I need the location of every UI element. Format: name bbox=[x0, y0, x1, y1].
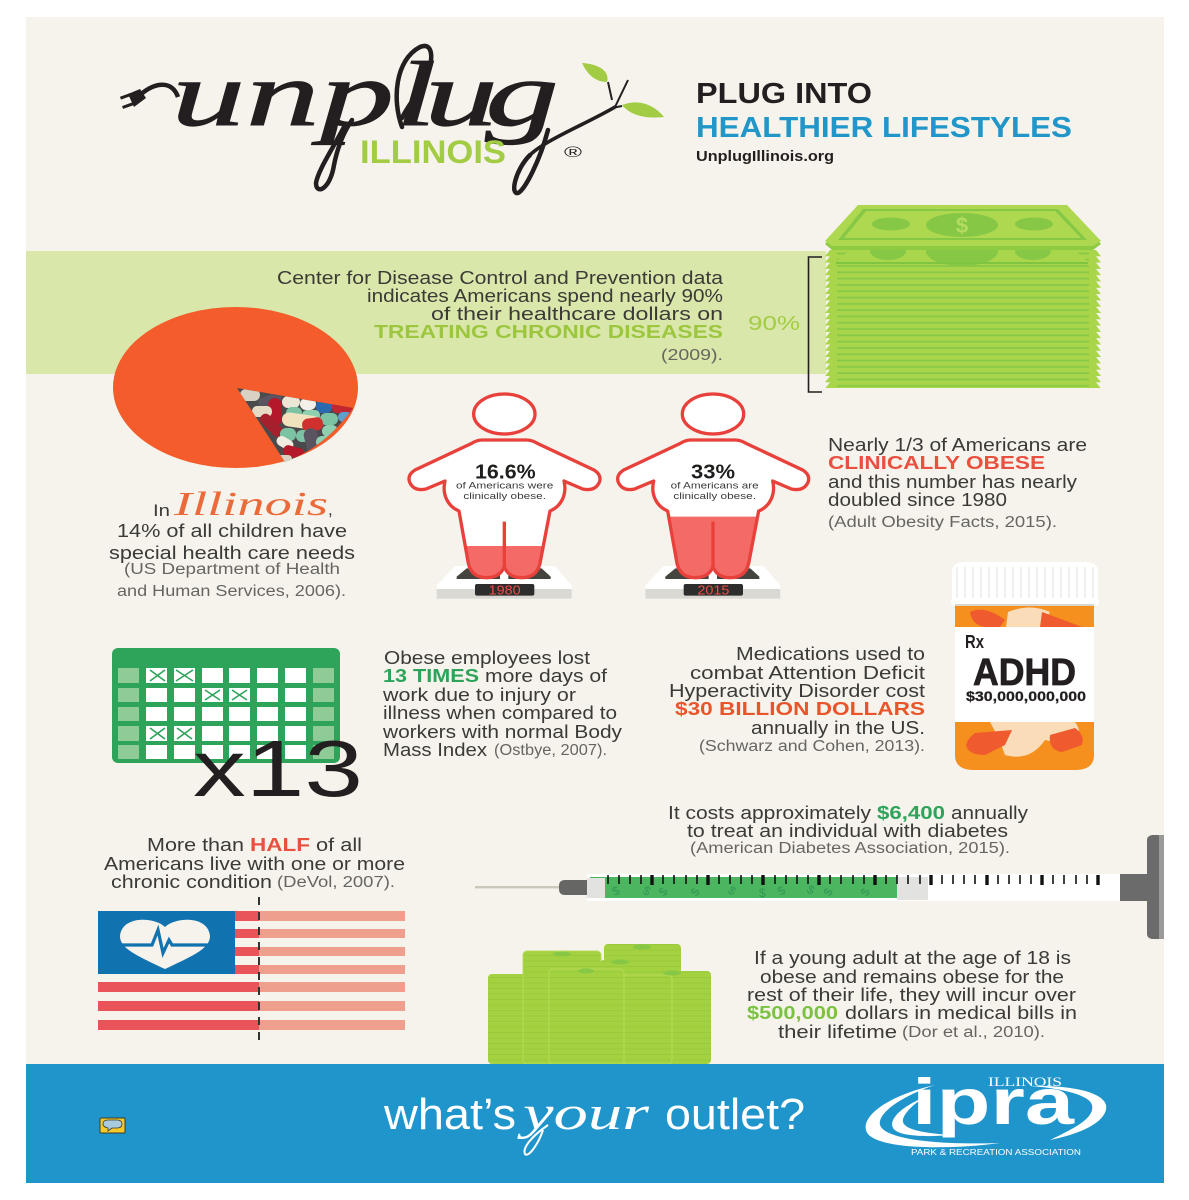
tagline: outlet? bbox=[665, 1090, 805, 1139]
text: diabetes cost: $6,400 bbox=[877, 803, 945, 823]
collar bbox=[587, 878, 605, 898]
icon: heart with pulse bbox=[120, 920, 210, 969]
calendar crosses bbox=[150, 670, 247, 739]
text: Illinois children: and Human Services, 2006). bbox=[117, 583, 346, 600]
icon: plug and cord bbox=[120, 85, 178, 109]
barrel bbox=[587, 874, 1122, 901]
icon: comment note bbox=[100, 1118, 125, 1133]
dollar signs: $ bbox=[687, 885, 703, 898]
text: clinically obese: (Adult Obesity Facts, 2015). bbox=[828, 514, 1057, 531]
pill wedge bbox=[237, 388, 353, 462]
text: ADHD medications: $30 BILLION DOLLARS bbox=[675, 699, 925, 719]
dollar signs: $ bbox=[759, 886, 766, 900]
body fill level bbox=[670, 516, 756, 576]
pill bottle bbox=[951, 562, 1099, 770]
text: diabetes cost: It costs approximately bbox=[668, 803, 871, 823]
text: more than half: More than bbox=[147, 835, 244, 855]
dollar signs: $ bbox=[820, 885, 836, 898]
cash piles bbox=[488, 944, 711, 1064]
text: diabetes cost: to treat an individual with diabetes bbox=[687, 821, 1008, 841]
tagline bbox=[383, 1087, 805, 1155]
text: Illinois children bbox=[109, 486, 355, 600]
top bill bbox=[825, 205, 1101, 250]
text: clinically obese: and this number has nearly bbox=[828, 472, 1077, 492]
text: Illinois children: special health care needs bbox=[109, 543, 355, 563]
text: chronic disease spending: indicates Americans spend nearly 90% bbox=[367, 286, 723, 306]
text: obese employees bbox=[382, 648, 622, 760]
plunger bbox=[1120, 874, 1147, 901]
money stack illustration bbox=[808, 205, 1101, 392]
pale stripes bbox=[259, 911, 405, 1030]
dollar signs: $ bbox=[610, 883, 623, 899]
calendar bbox=[112, 648, 363, 813]
text: obese employees: workers with normal Body bbox=[382, 722, 622, 742]
stack of bills bbox=[825, 250, 1101, 388]
dollar signs: $ bbox=[857, 885, 873, 898]
text: obese employees: Obese employees lost bbox=[384, 648, 590, 668]
heading block bbox=[696, 78, 1072, 165]
syringe bbox=[475, 835, 1164, 939]
text: chronic disease spending: Center for Disease Control and Prevention data bbox=[277, 268, 724, 288]
scale 2015 bbox=[645, 566, 780, 599]
figure: 1980 obesity bbox=[409, 394, 600, 599]
text: ADHD medications: Medications used to bbox=[736, 644, 925, 664]
head bbox=[682, 394, 744, 434]
text: lifetime medical bills bbox=[747, 948, 1077, 1042]
Rx: Rx bbox=[965, 632, 984, 652]
medicine bbox=[590, 877, 897, 898]
text: obese employees: more days of bbox=[485, 666, 608, 686]
text: chronic disease spending: of their healthcare dollars on bbox=[431, 304, 723, 324]
footer band bbox=[26, 1064, 1164, 1183]
plunger tip bbox=[897, 877, 928, 900]
website: UnplugIllinois.org bbox=[696, 148, 834, 165]
text: Illinois children: (US Department of Health bbox=[124, 561, 340, 578]
icon: twig and leaves bbox=[530, 63, 664, 155]
text: Illinois children: In bbox=[153, 501, 170, 520]
text: lifetime medical bills: (Dor et al., 2010). bbox=[902, 1024, 1045, 1041]
text: obese employees: work due to injury or bbox=[382, 685, 576, 705]
plunger handle bbox=[1147, 835, 1164, 939]
association name: PARK & RECREATION ASSOCIATION bbox=[911, 1147, 1081, 1157]
text: more than half: (DeVol, 2007). bbox=[277, 874, 395, 891]
text: ADHD medications bbox=[669, 644, 925, 755]
text: diabetes cost: (American Diabetes Association, 2015). bbox=[690, 840, 1010, 857]
text: more than half: of all bbox=[316, 835, 362, 855]
stat 33%: 33% bbox=[691, 461, 735, 483]
dollar signs: $ bbox=[775, 883, 788, 898]
x13: x13 bbox=[193, 724, 363, 813]
text: chronic disease spending: (2009). bbox=[661, 347, 723, 364]
minor ticks bbox=[608, 875, 1087, 884]
calendar weekend cells bbox=[118, 668, 334, 759]
logo wordmark: unplug bbox=[172, 43, 559, 145]
heading: healthier lifestyles: HEALTHIER LIFESTYLES bbox=[696, 112, 1072, 144]
text: obese employees: illness when compared to bbox=[383, 703, 617, 723]
green band bbox=[26, 251, 826, 374]
pie chart with pills bbox=[113, 307, 361, 468]
body bbox=[409, 440, 600, 578]
ipra wordmark: ipra bbox=[912, 1065, 1075, 1138]
dollar signs: $ bbox=[805, 882, 817, 898]
dollar signs: $ bbox=[641, 883, 653, 899]
hub bbox=[559, 880, 587, 895]
needle bbox=[475, 886, 559, 888]
caption: of Americans were bbox=[456, 481, 553, 491]
pills bbox=[966, 608, 1083, 757]
text: obese employees: (Ostbye, 2007). bbox=[494, 742, 607, 759]
dollar signs: $ bbox=[656, 885, 671, 899]
text: more than half bbox=[104, 835, 405, 892]
text: obese employees: 13 TIMES bbox=[383, 666, 479, 686]
logo: IPRA bbox=[866, 1065, 1106, 1157]
text: clinically obese: Nearly 1/3 of Americans are bbox=[828, 435, 1087, 455]
bracket bbox=[808, 257, 822, 392]
text: lifetime medical bills: obese and remains obese for the bbox=[760, 967, 1064, 987]
text: Illinois children: , bbox=[328, 500, 333, 519]
ILLINOIS: ILLINOIS bbox=[988, 1074, 1062, 1089]
stat 16.6%: 16.6% bbox=[475, 461, 536, 483]
text: ADHD medications: annually in the US. bbox=[751, 718, 925, 738]
logo: registered mark: ® bbox=[564, 144, 582, 161]
text: lifetime medical bills: their lifetime bbox=[778, 1022, 897, 1042]
tagline: your bbox=[516, 1087, 649, 1140]
head bbox=[474, 394, 535, 434]
handle highlight bbox=[1159, 835, 1164, 939]
body bbox=[618, 440, 809, 578]
caption: of Americans are bbox=[671, 481, 759, 491]
bottle body bbox=[955, 600, 1094, 770]
text: ADHD medications: Hyperactivity Disorder cost bbox=[669, 681, 925, 701]
tagline: what’s bbox=[383, 1090, 516, 1139]
scale 1980 bbox=[437, 566, 572, 599]
text: Illinois children: 14% of all children have bbox=[117, 521, 347, 541]
text: lifetime medical bills: rest of their life, they will incur over bbox=[747, 985, 1076, 1005]
flag with heart bbox=[98, 897, 405, 1047]
text: clinically obese bbox=[828, 435, 1087, 531]
dashed divider bbox=[258, 897, 260, 1047]
figure: 2015 obesity bbox=[618, 394, 809, 599]
logo: ILLINOIS: ILLINOIS bbox=[360, 134, 506, 170]
body outline bbox=[618, 440, 809, 578]
major ticks bbox=[652, 875, 1098, 885]
text: lifetime medical bills: dollars in medical bills in bbox=[845, 1003, 1077, 1023]
text: ADHD medications: (Schwarz and Cohen, 2013). bbox=[699, 738, 925, 755]
blue canton bbox=[98, 911, 235, 974]
amount: $30,000,000,000 bbox=[966, 688, 1086, 704]
text: diabetes cost bbox=[668, 803, 1028, 857]
caption line 2: clinically obese. bbox=[463, 491, 546, 501]
bottle label bbox=[955, 627, 1094, 722]
text: diabetes cost: annually bbox=[951, 803, 1028, 823]
text: clinically obese: doubled since 1980 bbox=[828, 490, 1007, 510]
scale 2015: 2015 bbox=[697, 583, 729, 597]
red stripes bbox=[98, 911, 259, 1030]
cap bbox=[951, 562, 1099, 606]
text: chronic disease spending: TREATING CHRONIC DISEASES bbox=[374, 322, 723, 342]
label: 90%: 90% bbox=[748, 313, 800, 335]
logo: Unplug Illinois bbox=[120, 43, 664, 193]
logo letter flourishes bbox=[316, 46, 548, 193]
scale 1980: 1980 bbox=[489, 583, 521, 597]
text: lifetime medical bills: If a young adult at the age of 18 is bbox=[754, 948, 1071, 968]
text: more than half: chronic condition bbox=[111, 872, 272, 892]
ADHD: ADHD bbox=[973, 652, 1076, 694]
text: more than half: Americans live with one or more bbox=[104, 854, 405, 874]
dollar signs bbox=[610, 882, 873, 900]
text: Illinois children: Illinois bbox=[172, 486, 328, 523]
body outline bbox=[409, 440, 600, 578]
text: chronic disease spending bbox=[277, 268, 724, 364]
text: clinically obese: CLINICALLY OBESE bbox=[828, 453, 1045, 473]
top bill: $ bbox=[956, 213, 968, 238]
text: lifetime medical bills: $500,000 bbox=[747, 1003, 838, 1023]
calendar day cells bbox=[146, 668, 306, 759]
text: more than half: HALF bbox=[250, 835, 310, 855]
caption line 2: clinically obese. bbox=[673, 491, 756, 501]
text: obese employees: Mass Index bbox=[383, 740, 487, 760]
dollar signs: $ bbox=[725, 883, 739, 898]
body fill level bbox=[467, 546, 542, 576]
heading: plug into: PLUG INTO bbox=[696, 78, 872, 110]
text: ADHD medications: combat Attention Deficit bbox=[690, 663, 925, 683]
